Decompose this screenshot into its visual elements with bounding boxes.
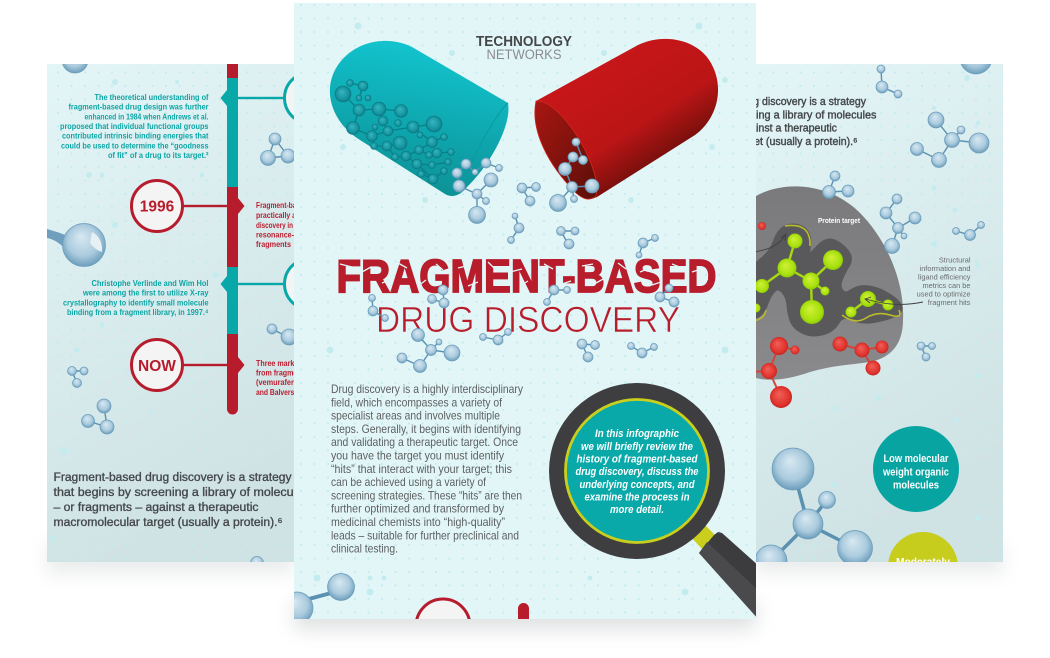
text: right page lead paragraph: that begins by screening a library of molecules — [652, 109, 877, 121]
magnifier text: we will briefly review the — [581, 441, 693, 453]
text: intro paragraph: “hits” that interact with your target; this — [331, 462, 512, 476]
text: 1997 milestone: binding from a fragment library, in 1997.⁴ — [67, 307, 208, 317]
badge: low molecular weight: Low molecular — [884, 453, 949, 465]
text: 1997 milestone: Christophe Verlinde and Wim Hol — [92, 278, 208, 288]
text: intro paragraph: field, which encompasses a variety of — [331, 395, 503, 409]
text: optimize note — [917, 256, 971, 307]
binding pocket — [750, 227, 900, 333]
text: 1996 milestone: Fragment-based — [256, 201, 308, 210]
text: optimize note: information and — [920, 264, 970, 273]
capsule molecules — [335, 80, 454, 184]
magnifier text: history of fragment-based — [576, 454, 698, 466]
label: protein target: Protein target — [818, 216, 860, 225]
logo: Technology Networks: NETWORKS — [486, 47, 562, 62]
text: intro paragraph: screening strategies. These “hits” are then — [331, 488, 522, 502]
text: left page lead paragraph: macromolecular target (usually a protein).⁶ — [54, 515, 282, 529]
timeline node: teal 1984 — [220, 76, 294, 120]
text: intro paragraph: medicinal chemists into “high-quality” — [331, 515, 505, 529]
text: left page lead paragraph: – or fragments – against a therapeutic — [54, 500, 258, 514]
molecules: right page — [755, 42, 992, 577]
magnifier text — [576, 428, 698, 516]
text: intro paragraph: specialist areas and involves multiple — [331, 409, 500, 423]
text: 1996 milestone: fragments — [256, 240, 291, 249]
magnifier text: underlying concepts, and — [580, 479, 695, 491]
panel: center cover page — [281, 3, 760, 653]
page shadows — [47, 545, 1003, 630]
text: right page lead paragraph — [756, 96, 876, 148]
text: 1984 milestone: fragment-based drug design was further — [68, 102, 209, 112]
molecules: left page — [47, 47, 297, 570]
title: fragment-based drug discovery: FRAGMENT-BASED — [336, 250, 716, 302]
molecules: around title — [368, 284, 679, 372]
timeline start bar — [518, 603, 529, 627]
text: 1997 milestone: were among the first to utilize X-ray — [82, 288, 209, 298]
text: now milestone — [256, 360, 294, 395]
text: intro paragraph: can be achieved using a variety of — [331, 475, 487, 489]
green fragments — [752, 234, 894, 324]
timeline bar — [227, 64, 238, 415]
text: optimize note: used to optimize — [917, 290, 970, 298]
text: intro paragraph: you have the target you must identify — [331, 448, 504, 462]
badge: low molecular weight: molecules — [893, 480, 939, 492]
timeline node: teal 1997 — [220, 262, 294, 306]
text: 1984 milestone: could be used to determine the “goodness — [61, 140, 209, 150]
text: 1997 milestone — [63, 278, 209, 317]
title: fragment-based drug discovery: DRUG DISCOVERY — [376, 299, 680, 340]
text: right page lead paragraph: – or fragments – against a therapeutic — [658, 123, 837, 135]
text: right page lead paragraph: Fragment-based drug discovery is a strategy — [658, 96, 866, 108]
text: left page lead paragraph: Fragment-based drug discovery is a strategy — [54, 470, 292, 484]
text: 1984 milestone — [60, 92, 209, 160]
red fragments — [750, 222, 888, 408]
text: now milestone: (vemurafenib — [256, 378, 302, 387]
text: intro paragraph: and validating a therapeutic target. Once — [331, 435, 518, 449]
text: 1996 milestone: discovery in — [256, 221, 293, 230]
icon: magnifying glass callout — [549, 383, 760, 621]
text: 1984 milestone: contributed intrinsic binding energies that — [62, 131, 209, 141]
timeline node: now: NOW — [138, 358, 176, 375]
panel: right page process — [756, 64, 1003, 562]
text: 1984 milestone: The theoretical understanding of — [94, 92, 209, 102]
text: 1984 milestone: proposed that individual functional groups — [60, 121, 209, 131]
timeline node: 1996: 1996 — [140, 198, 175, 216]
timeline node: 1996 — [132, 180, 244, 232]
badge: low molecular weight: weight organic — [882, 466, 949, 478]
magnifier text: drug discovery, discuss the — [576, 466, 698, 478]
text: right page lead paragraph: macromolecular target (usually a protein).⁶ — [658, 136, 858, 148]
title: fragment-based drug discovery — [338, 258, 716, 332]
text: 1984 milestone: enhanced in 1984 when Andrews et al. — [84, 111, 208, 121]
text: now milestone: from fragment — [256, 368, 304, 378]
text: 1996 milestone: practically a — [256, 211, 296, 220]
text: intro paragraph: further optimized and transformed by — [331, 502, 504, 516]
text: optimize note: ligand efficiency — [918, 272, 971, 282]
text: 1996 milestone: resonance- — [256, 230, 294, 240]
timeline start circle — [416, 599, 470, 653]
molecule: bottom left of cover — [294, 573, 355, 619]
badge: low molecular weight — [873, 426, 959, 512]
panel: left page timeline — [47, 64, 294, 562]
arrow: to fragment — [752, 234, 786, 252]
icon: teal capsule half — [330, 41, 508, 196]
text: intro paragraph — [331, 382, 523, 556]
icon: red capsule half — [535, 39, 718, 199]
magnifier text: In this infographic — [595, 428, 679, 440]
magnifier text: examine the process in — [584, 492, 690, 504]
text: now milestone: Three marketed — [256, 359, 309, 368]
chart: protein target with fragments — [750, 186, 903, 380]
text: optimize note: metrics can be — [922, 281, 970, 290]
logo: Technology Networks: TECHNOLOGY — [476, 34, 572, 50]
arrow: note to fragment — [865, 297, 923, 304]
text: intro paragraph: leads – suitable for further preclinical and — [331, 528, 519, 542]
text: intro paragraph: steps. Generally, it begins with identifying — [331, 422, 521, 436]
text: intro paragraph: Drug discovery is a highly interdisciplinary — [331, 382, 523, 396]
text: left page lead paragraph: that begins by screening a library of molecules — [54, 485, 310, 499]
timeline node: now — [132, 340, 244, 390]
text: 1996 milestone — [256, 202, 294, 248]
badge: moderately — [888, 532, 958, 562]
pocket outline — [752, 225, 900, 321]
text: intro paragraph: clinical testing. — [331, 542, 398, 556]
magnifier text: more detail. — [610, 504, 664, 516]
text: 1984 milestone: of fit” of a drug to its target.² — [108, 150, 209, 160]
text: now milestone: and Balversa — [256, 388, 298, 397]
text: left page lead paragraph — [54, 470, 310, 529]
text: optimize note: Structural — [939, 256, 971, 264]
text: optimize note: fragment hits — [928, 298, 971, 307]
badge: moderately: Moderately — [896, 556, 951, 568]
text: 1997 milestone: crystallography to identify small molecule — [63, 297, 209, 307]
molecules: spilling from capsules — [452, 138, 658, 258]
logo: Technology Networks — [476, 36, 572, 59]
title distress marks — [340, 262, 708, 286]
